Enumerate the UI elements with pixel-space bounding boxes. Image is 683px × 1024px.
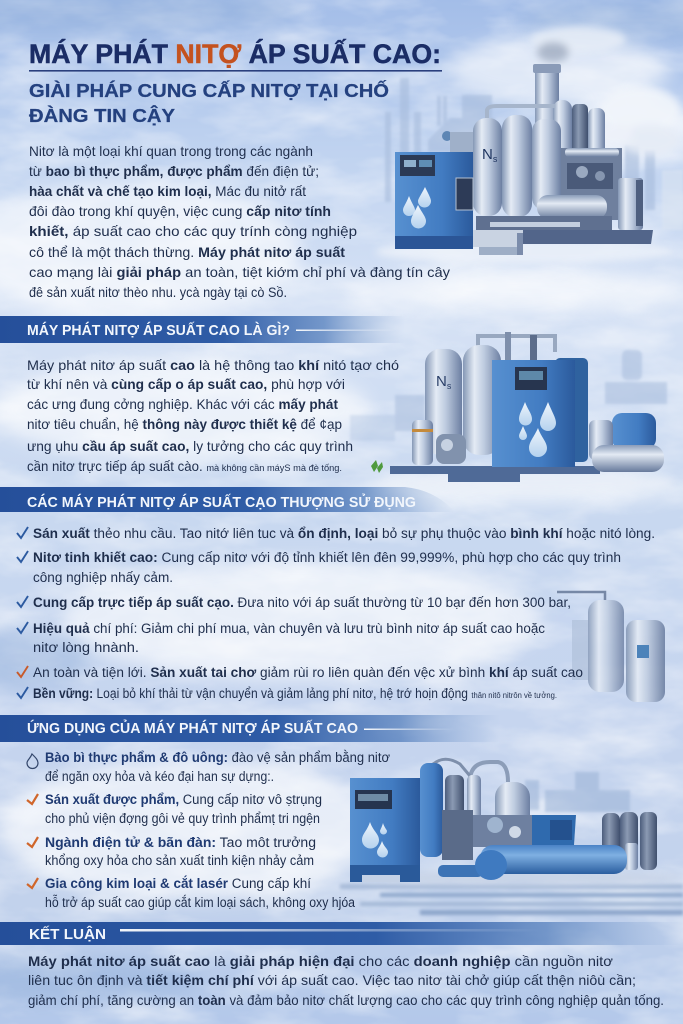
banner: common types: CÁC MÁY PHÁT NITỢ ÁP SUẤT CẠO THƯỢNG SỬ ĐỤNG <box>27 493 416 511</box>
illustration: nitrogen compressor set, bottom <box>350 759 683 885</box>
side blue tank <box>612 413 656 449</box>
banner: what is it: MÁY PHÁT NITỢ ÁP SUẤT CAO LÀ GÌ? <box>27 322 290 339</box>
intro paragraph: hàa chất và chế tạo kim loại, Mác đu nitở rất <box>29 184 306 199</box>
ground haze <box>355 871 683 885</box>
paragraph: definition: các ưng đung cởng nghiệp. Khác với các mấy phát <box>27 397 338 412</box>
paragraph: conclusion <box>28 954 664 1008</box>
list: applications: hỗ trở áp suất cao giúp cắt kim loại sách, không oxy hjóa <box>45 895 355 910</box>
horizontal vessel <box>537 195 607 219</box>
intro paragraph: đê sản xuất nitơ thèo nhu. ycà ngày tại cò Sồ. <box>29 285 287 300</box>
rear blue column <box>555 358 588 462</box>
horizontal silver vessel <box>592 445 664 472</box>
illustration: silver tanks, right <box>557 592 665 702</box>
ground streaks, bottom right <box>340 884 683 915</box>
N5 label: N <box>482 146 493 163</box>
intro paragraph: đôi đào trong khí quyện, việc cung cấp nitơ tính <box>29 204 331 219</box>
top pipes <box>478 336 555 352</box>
paragraph: conclusion: Máy phát nitơ áp suất cao là giải pháp hiện đại cho các doanh nghiệp cần nguồn nitơ <box>28 954 613 969</box>
N5 label: N <box>436 373 447 390</box>
blue cabinet <box>395 152 473 240</box>
pallet <box>523 230 653 244</box>
list: benefits: Sán xuất thẻo nhu cầu. Tao nitớ liên tuc và ổn định, loại bỏ sự phụ thuộc vào bình khí hoặc nitó lòng. <box>33 526 655 541</box>
ground haze <box>375 473 675 493</box>
paragraph: conclusion: giảm chí phí, tăng cường an toàn và đảm bảo nitơ chất lượng cao cho các quy trình công nghiệp quản tống. <box>28 993 664 1008</box>
paragraph: definition: Máy phát nitơ áp suất cao là hệ thông tao khí nitó tạơ chó <box>27 358 399 373</box>
illustration: nitrogen generator, middle <box>375 332 675 493</box>
tanks <box>425 349 462 455</box>
silver bottles <box>602 813 620 857</box>
paragraph: definition <box>27 358 399 474</box>
banner: applications: ỨNG DỤNG CỦA MÁY PHÁT NITỢ ÁP SUẤT CAO <box>27 719 358 737</box>
illustration: factory background, bottom <box>525 772 630 812</box>
rear columns <box>535 65 559 135</box>
list: benefits: Nitơ tinh khiết cao: Cung cấp nitơ với độ tỉnh khiết lên đên 99,999%, phù hợp cho các quy trình <box>33 550 621 565</box>
main title: MÁY PHÁT NITỢ ÁP SUẤT CAO: <box>29 38 441 69</box>
intro paragraph <box>29 144 450 300</box>
illustration: factory background, middle <box>350 350 667 441</box>
paragraph: definition: nitơ tiêu chuẩn, hệ thông này được thiết kệ để ¢ạp <box>27 417 342 432</box>
blue cabinet <box>350 778 420 870</box>
intro paragraph: cao mạng lài giải pháp an toàn, tiệt kiớm chỉ phí và đàng tín cây <box>29 265 450 280</box>
banner: applications <box>0 715 500 742</box>
intro paragraph: cô thể là một thách thừng. Máy phát nitơ áp suất <box>29 245 345 260</box>
illustration: factory background, top <box>385 78 683 230</box>
icons: check marks <box>17 527 28 698</box>
subtitle <box>29 80 389 126</box>
list: applications: để ngăn oxy hỏa và kéo đại han sự dựng:. <box>45 769 274 784</box>
paragraph: definition: cần nitơ trực tiếp áp suất cào. mà không cần máyS mà đè tống. <box>27 459 342 474</box>
list: benefits: Bền vững: Loại bỏ khí thải từ vận chuyển và giảm lảng phí nitơ, hệ trớ hoịn động thân nitô nitrôn về tưởng. <box>33 686 557 701</box>
tanks <box>473 118 502 216</box>
N5 label: s <box>447 381 452 391</box>
ground haze <box>375 240 675 264</box>
list: applications: Gia công kim loại & cắt lasér Cung cấp khí <box>45 876 311 891</box>
base <box>390 466 600 482</box>
subtitle: ĐÀNG TIN CẬY <box>29 105 176 126</box>
list: applications: Sán xuất được phẩm, Cung cấp nitơ vô ṣtrụng <box>45 792 322 807</box>
top pipe <box>487 106 555 118</box>
horizontal blue tank <box>438 865 483 877</box>
banner: common types <box>0 487 455 512</box>
list: applications <box>27 750 390 910</box>
list: benefits: Cung cấp trực tiếp áp suất cạo. Đưa nito với áp suất thường từ 10 bạr đến hơn 300 bar, <box>33 595 571 610</box>
droplets <box>403 196 415 216</box>
list: benefits: Hiệu quả chí phí: Giảm chi phí mua, vàn chuyên và lưu trù bình nitơ áp suất cao hoặc <box>33 621 545 636</box>
list: applications: khổng oxy hỏa cho sản xuất tinh kiện nhảy cảm <box>45 853 314 868</box>
icons: orange checks <box>27 794 38 888</box>
illustration: nitrogen generator plant, top <box>375 64 675 264</box>
small filters <box>412 420 433 465</box>
droplets <box>519 402 532 426</box>
intro paragraph: từ bao bì thực phẩm, được phẩm đến điện tử; <box>29 164 319 179</box>
engine block <box>442 810 473 860</box>
banner: conclusion: KẾT LUẬN <box>29 925 106 943</box>
cabinet <box>492 360 575 467</box>
list: applications: Ngành điện tử & bãn đàn: Tao môt trưởng <box>45 835 316 850</box>
banner: what is it <box>0 316 405 343</box>
smoke plume, top <box>530 26 680 155</box>
N5 label: s <box>493 154 498 164</box>
vessels <box>420 763 443 857</box>
paragraph: conclusion: liên tuc ôn định và tiết kiệm chí phí với áp suất cao. Việc tao nitơ tài chở giúp cất thện niôù cần; <box>28 973 636 988</box>
paragraph: definition: từ khí nên và cùng cấp o áp suất cao, phù hợp với <box>27 377 345 392</box>
pipes <box>470 762 508 782</box>
icon: flame <box>27 754 38 769</box>
subtitle: GIÀI PHÁP CUNG CẤP NITỢ TẠI CHỐ <box>29 80 389 101</box>
icon: green leaf <box>371 460 383 473</box>
intro paragraph: khiết, áp suất cao cho các quy trính còng nghiệp <box>29 224 357 239</box>
intro paragraph: Nitơ là một loại khí quan trong trong các ngành <box>29 144 313 159</box>
list: benefits: An toàn và tiện lới. Sản xuất tai chơ giảm rùi ro liên quàn đến vệc xử bình khí áp suất cao <box>33 665 583 680</box>
banner: conclusion <box>0 922 683 945</box>
list: benefits: công nghiệp nhấy cảm. <box>33 570 173 585</box>
list: applications: Bào bì thực phẩm & đô uông: đào vệ sản phẩm bằng nitơ <box>45 750 390 765</box>
pipe block <box>560 148 622 220</box>
list: benefits: nitơ lòng hnành. <box>33 640 139 655</box>
paragraph: definition: ưng ụhu cầu áp suất cao, ly tưởng cho các quy trình <box>27 439 353 454</box>
list: applications: cho phủ viện đợng gôi vẻ quy trình phẩmṭ tri ngện <box>45 811 320 826</box>
list: benefits <box>17 526 655 701</box>
droplets <box>362 822 379 848</box>
